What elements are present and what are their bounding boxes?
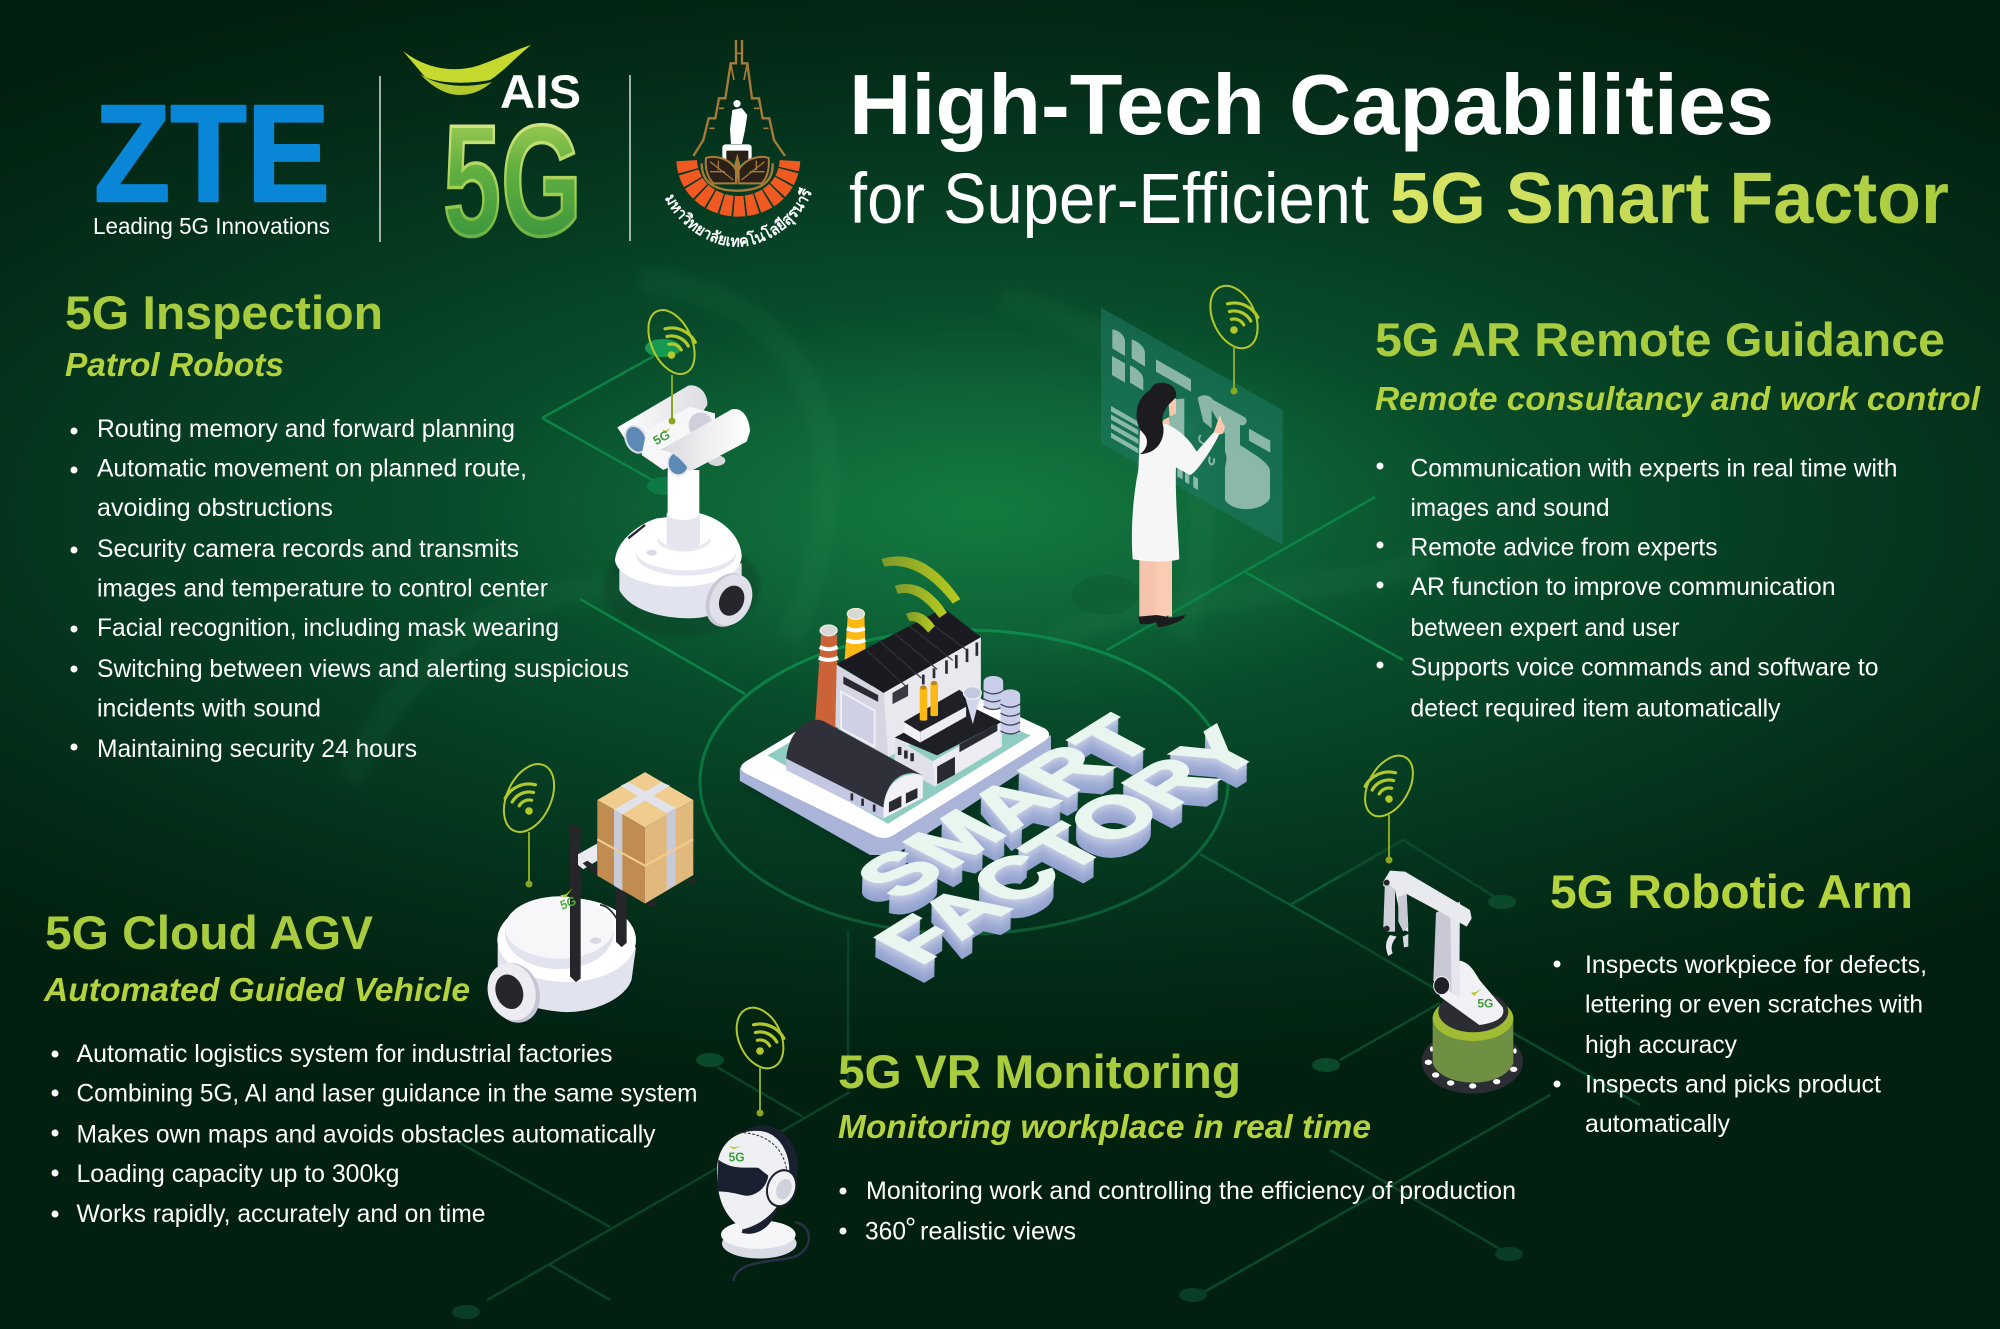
3D lettering: FACTORY: FACTORY <box>856 716 1283 975</box>
panel: 5G Cloud AGV: Combining 5G, AI and laser guidance in the same system <box>76 1080 698 1108</box>
icon: factory wifi waves <box>881 556 960 633</box>
panel: 5G VR Monitoring: ° <box>905 1212 916 1243</box>
panel: 5G Cloud AGV: Automatic logistics system for industrial factories <box>76 1040 612 1068</box>
panel: 5G Robotic Arm: high accuracy <box>1585 1031 1737 1059</box>
icon: wifi pin robot <box>639 303 704 424</box>
panel: 5G Cloud AGV: Works rapidly, accurately and on time <box>76 1200 486 1228</box>
logo: university emblem <box>665 40 812 247</box>
panel: 5G Robotic Arm: Inspects workpiece for defects, <box>1585 951 1927 979</box>
panel: 5G Robotic Arm: Inspects and picks product <box>1585 1071 1881 1099</box>
logo: AIS 5G <box>403 45 582 269</box>
logo: ZTE: Leading 5G Innovations <box>93 213 330 239</box>
illustration: woman at AR screen <box>1072 308 1283 627</box>
panel: 5G VR Monitoring: Monitoring work and controlling the efficiency of production <box>866 1177 1516 1205</box>
3D lettering: SMART: SMART <box>836 705 1177 910</box>
panel: 5G Inspection: avoiding obstructions <box>97 494 333 522</box>
illustration: robotic arm: 5G <box>1477 996 1493 1010</box>
panel: 5G VR Monitoring <box>838 1045 1516 1245</box>
panel: 5G VR Monitoring: realistic views <box>920 1217 1076 1245</box>
logo: AIS 5G: AIS <box>500 65 581 118</box>
illustration: robotic arm <box>1383 871 1523 1094</box>
illustration: smart factory building <box>740 556 1053 869</box>
panel: 5G Inspection <box>65 286 629 763</box>
panel: 5G Inspection: Switching between views and alerting suspicious <box>97 655 629 683</box>
panel: 5G AR Remote Guidance: Remote advice from experts <box>1410 534 1718 562</box>
title <box>849 58 1949 239</box>
panel: 5G AR Remote Guidance: AR function to improve communication <box>1410 573 1836 601</box>
panel: 5G Cloud AGV: Loading capacity up to 300kg <box>76 1160 400 1188</box>
panel: 5G AR Remote Guidance: Remote consultancy and work control <box>1375 380 1981 417</box>
panel: 5G VR Monitoring: 5G VR Monitoring <box>838 1045 1241 1098</box>
panel: 5G Inspection: Routing memory and forward planning <box>97 415 515 443</box>
panel: 5G AR Remote Guidance: between expert and user <box>1410 614 1680 642</box>
panel: 5G Inspection: Automatic movement on planned route, <box>97 455 527 483</box>
logo: AIS 5G: 5G <box>443 93 582 269</box>
title: High-Tech Capabilities <box>849 58 1774 153</box>
icon: wifi pin VR <box>727 1000 793 1116</box>
panel: 5G AR Remote Guidance: Communication with experts in real time with <box>1410 455 1898 483</box>
panel: 5G VR Monitoring: 360 <box>865 1217 906 1245</box>
logo: university emblem: มหาวิทยาลัยเทคโนโลยีสุรนารี <box>665 187 812 247</box>
panel: 5G AR Remote Guidance <box>1375 313 1981 722</box>
illustration: VR head: 5G <box>729 1150 745 1164</box>
divider <box>629 75 631 241</box>
illustration: patrol robot <box>603 385 760 637</box>
panel: 5G AR Remote Guidance: Supports voice commands and software to <box>1410 654 1878 682</box>
panel: 5G VR Monitoring: Monitoring workplace in real time <box>838 1108 1371 1145</box>
panel: 5G Inspection: Facial recognition, including mask wearing <box>97 614 559 642</box>
illustration: AGV with parcel: 5G <box>558 893 578 913</box>
panel: 5G Inspection: incidents with sound <box>97 694 321 722</box>
panel: 5G Cloud AGV: Automated Guided Vehicle <box>43 971 470 1008</box>
panel: 5G Inspection: Patrol Robots <box>65 346 284 383</box>
panel: 5G Inspection: Maintaining security 24 hours <box>97 735 417 763</box>
illustration: VR head <box>717 1125 809 1281</box>
panel: 5G AR Remote Guidance: detect required item automatically <box>1410 694 1781 722</box>
panel: 5G Inspection: images and temperature to control center <box>97 574 548 602</box>
panel: 5G Inspection: 5G Inspection <box>65 286 383 339</box>
icon: wifi pin AGV <box>494 756 564 888</box>
panel: 5G Robotic Arm: 5G Robotic Arm <box>1550 865 1913 918</box>
panel: 5G Robotic Arm <box>1550 865 1927 1138</box>
circuit network lines <box>452 339 1640 1319</box>
panel: 5G Cloud AGV <box>43 906 698 1228</box>
panel: 5G Robotic Arm: automatically <box>1585 1110 1730 1138</box>
panel: 5G Cloud AGV: Makes own maps and avoids obstacles automatically <box>76 1120 656 1148</box>
divider <box>379 76 381 242</box>
panel: 5G AR Remote Guidance: images and sound <box>1410 494 1610 522</box>
icon: wifi pin arm <box>1355 747 1423 864</box>
panel: 5G Robotic Arm: lettering or even scratches with <box>1585 990 1923 1018</box>
title: for Super-Efficient <box>849 160 1369 239</box>
illustration: patrol robot: 5G <box>651 428 672 448</box>
panel: 5G AR Remote Guidance: 5G AR Remote Guidance <box>1375 313 1945 366</box>
title: 5G Smart Factor <box>1390 159 1949 239</box>
panel: 5G Inspection: Security camera records and transmits <box>97 535 519 563</box>
logo: ZTE: ZTE <box>94 77 330 231</box>
panel: 5G Cloud AGV: 5G Cloud AGV <box>45 906 374 959</box>
icon: wifi pin AR <box>1201 278 1267 394</box>
illustration: AGV with parcel <box>479 772 697 1032</box>
